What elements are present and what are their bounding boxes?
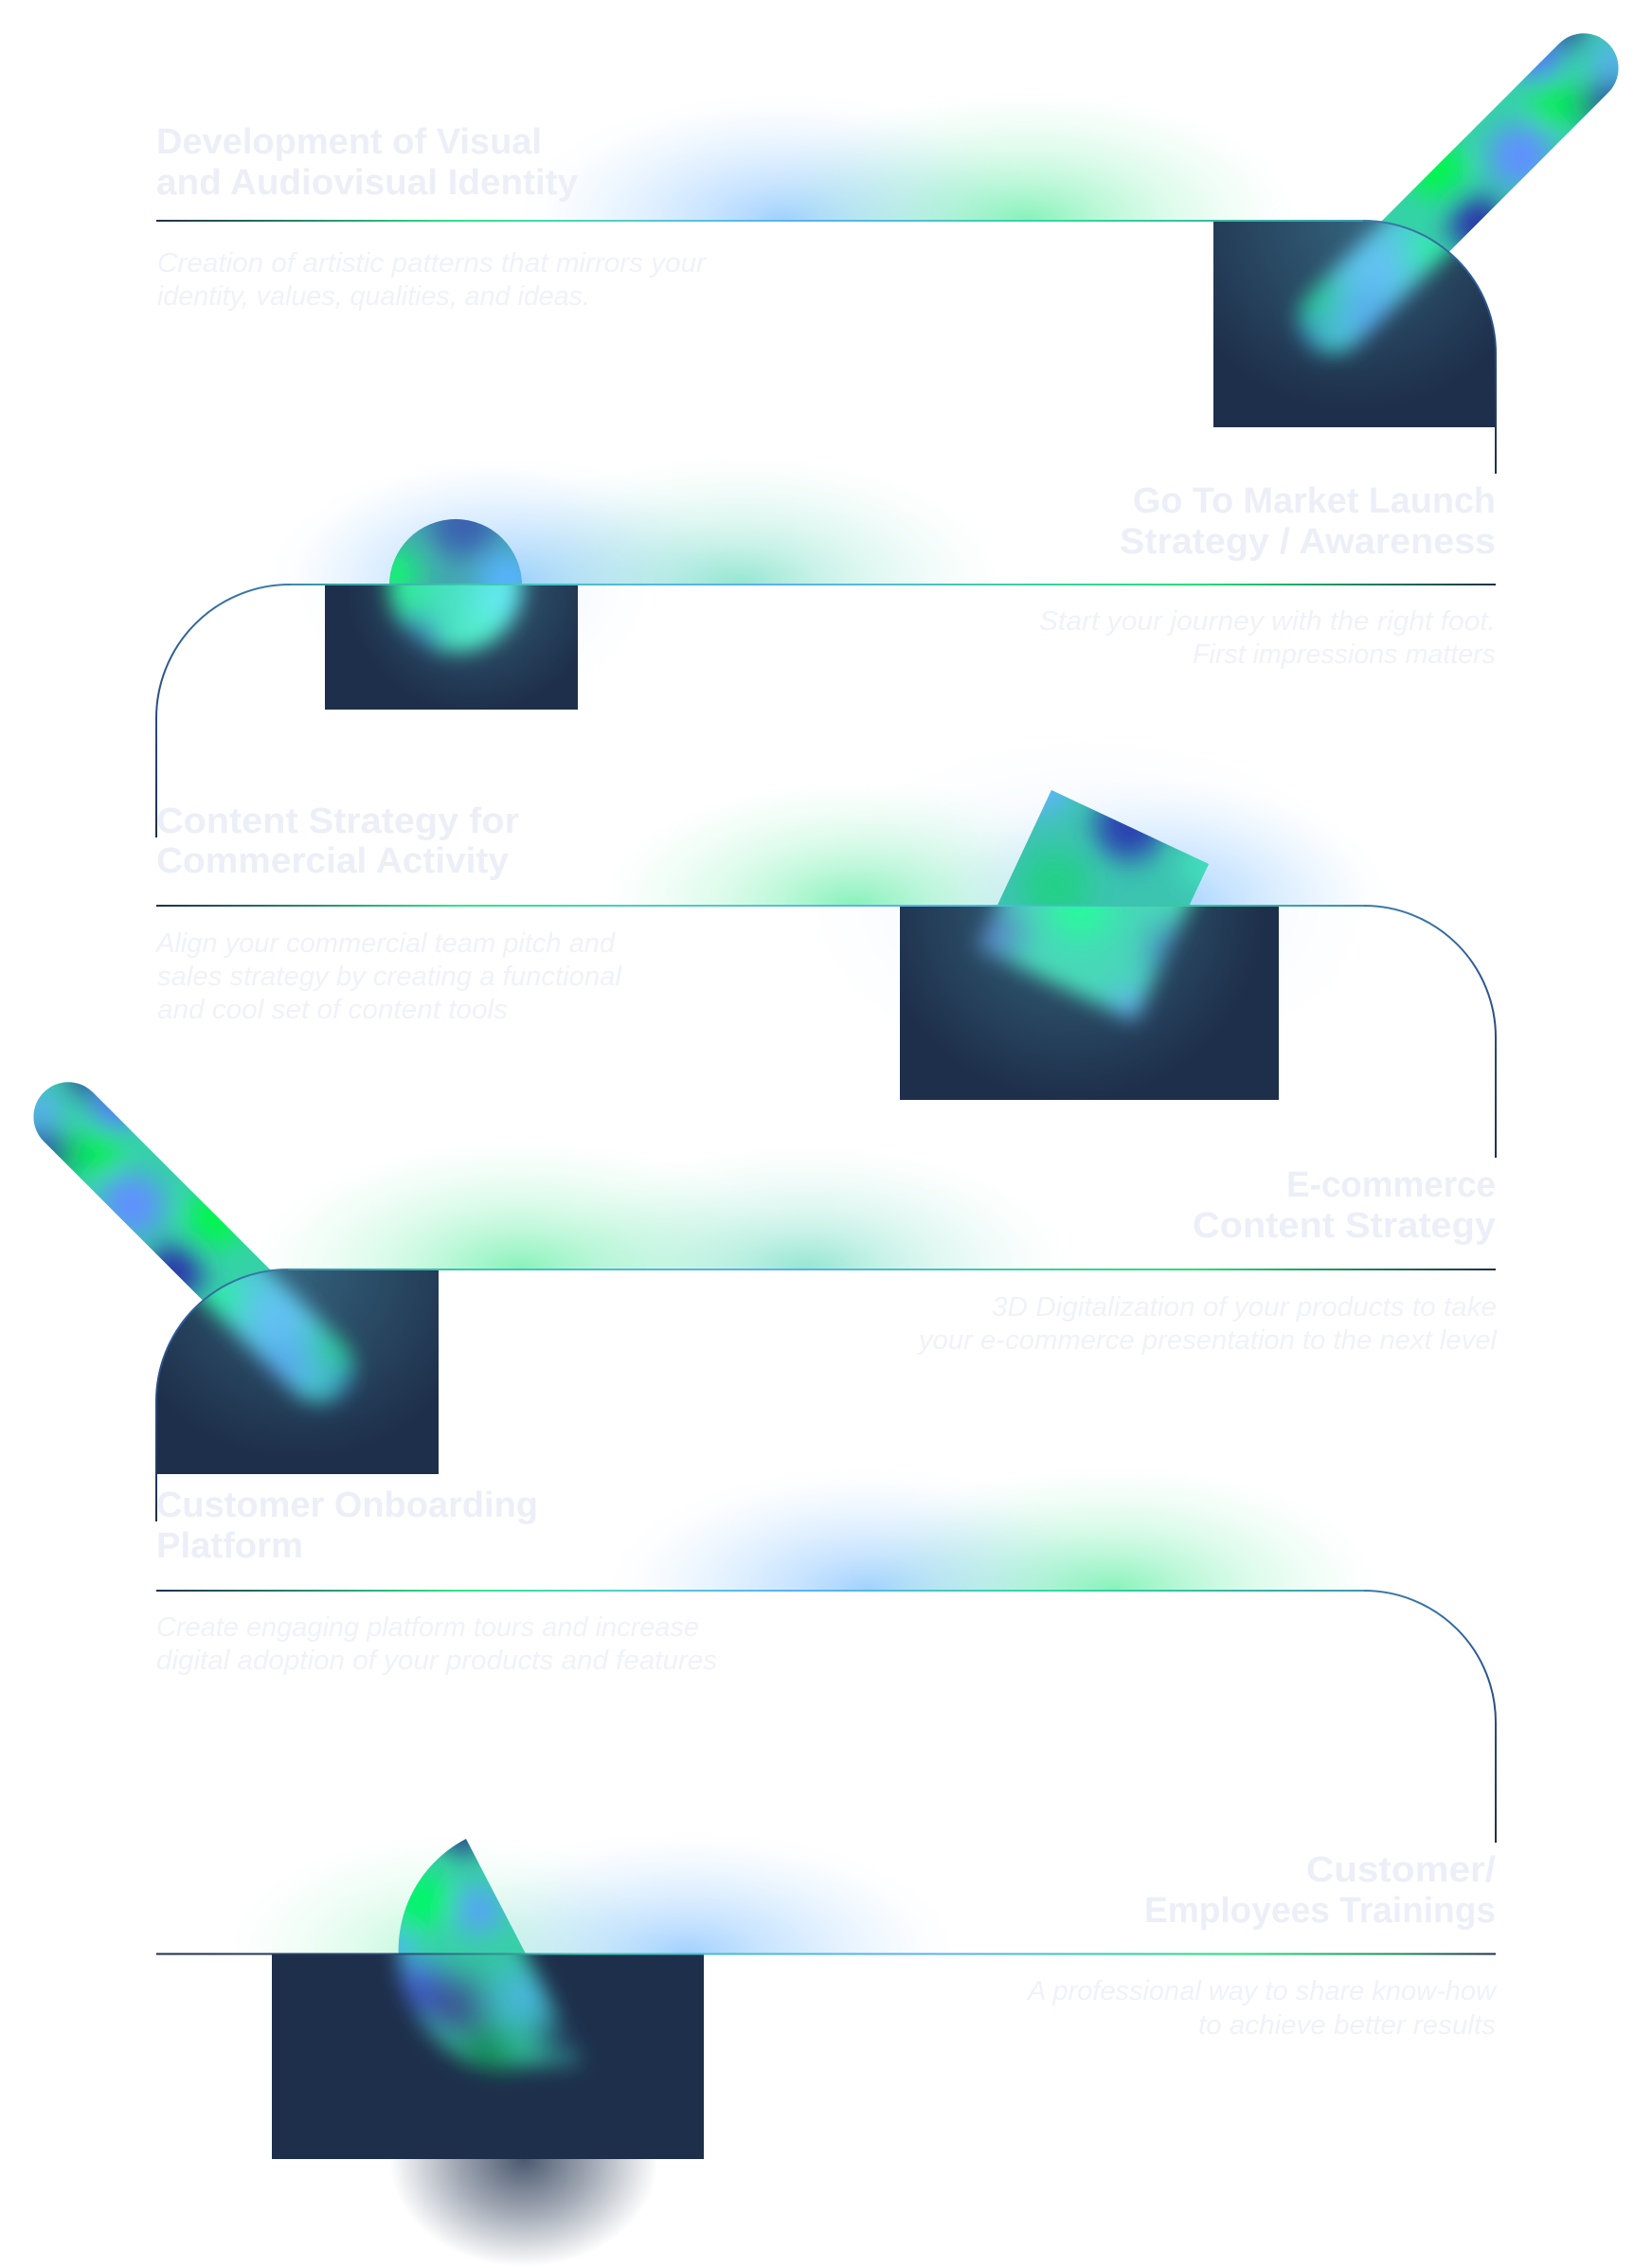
icon: blurred circle inside panel [373, 585, 537, 667]
heading 2 [1120, 481, 1496, 562]
description 4: 3D Digitalization of your products to take [992, 1292, 1497, 1323]
path line 1 [156, 221, 1496, 474]
heading 4 [1193, 1165, 1496, 1246]
glow above line 1 [567, 111, 1256, 220]
description 4: your e-commerce presentation to the next level [917, 1325, 1499, 1356]
heading 1: and Audiovisual Identity [156, 163, 578, 203]
glow around line 3 [640, 788, 1355, 905]
description 6: to achieve better results [1198, 2010, 1496, 2041]
description 1: identity, values, qualities, and ideas. [157, 281, 590, 312]
icon: blurred bar inside panel [1285, 222, 1459, 368]
description 1 [157, 248, 707, 312]
section 2: go to market [156, 452, 1496, 837]
section 1: visual identity [156, 8, 1634, 474]
heading 4: Content Strategy [1193, 1206, 1496, 1246]
glow above line 4 [293, 1160, 1021, 1269]
heading 3 [156, 801, 519, 881]
description 2: Start your journey with the right foot. [1039, 606, 1496, 637]
icon: blurred bar inside panel [192, 1270, 367, 1415]
heading 3: Commercial Activity [156, 841, 509, 881]
icon: bar above panel [1381, 33, 1619, 252]
panel 1 [1213, 221, 1496, 427]
icon: wedge above panel [398, 1839, 525, 1953]
heading 5: Customer Onboarding [156, 1485, 538, 1525]
shadow under panel 6 [389, 2051, 658, 2267]
path line 5 [156, 1591, 1496, 1843]
panel 4 [156, 1269, 439, 1474]
heading 1: Development of Visual [156, 122, 542, 162]
description 5: Create engaging platform tours and increase [156, 1612, 699, 1643]
heading 6 [1144, 1850, 1496, 1931]
icon: square above panel [997, 790, 1209, 905]
glow above line 6 [273, 1854, 906, 1953]
section 5: onboarding [156, 1463, 1496, 1843]
heading 5: Platform [156, 1526, 303, 1566]
heading 6: Employees Trainings [1144, 1891, 1496, 1931]
description 5: digital adoption of your products and features [156, 1646, 717, 1676]
heading 2: Go To Market Launch [1133, 481, 1496, 521]
heading 2: Strategy / Awareness [1120, 522, 1496, 562]
heading 4: E-commerce [1286, 1165, 1496, 1205]
description 3: Align your commercial team pitch and [154, 928, 616, 959]
path line 4 [156, 1269, 1496, 1521]
icon: bar above panel [33, 1082, 271, 1300]
description 4 [917, 1292, 1499, 1356]
heading 3: Content Strategy for [156, 801, 519, 841]
section 6: trainings [156, 1806, 1498, 2267]
heading 5 [156, 1485, 538, 1566]
path line 3 [156, 906, 1496, 1158]
description 6 [1026, 1976, 1498, 2041]
description 1: Creation of artistic patterns that mirrors your [157, 248, 707, 279]
panel 3 [900, 906, 1279, 1100]
description 2: First impressions matters [1193, 639, 1496, 670]
icon: blurred square inside panel [969, 907, 1206, 1032]
heading 6: Customer/ [1306, 1850, 1496, 1890]
panel 6 [272, 1953, 704, 2159]
glow above line 5 [656, 1485, 1338, 1590]
path line 6 [156, 1953, 1496, 1955]
path line 2 [156, 585, 1496, 837]
icon: mirrored bar and panel [18, 1056, 439, 1474]
icon: blurred wedge inside panel [385, 1955, 587, 2083]
description 5 [156, 1612, 717, 1676]
description 3: and cool set of content tools [157, 995, 508, 1025]
section 4: e-commerce [18, 1056, 1499, 1521]
glow around line 2 [305, 477, 955, 584]
description 6: A professional way to share know-how [1026, 1976, 1498, 2007]
description 2 [1039, 606, 1496, 670]
section 3: content strategy [155, 788, 1497, 1158]
description 3 [154, 928, 623, 1025]
description 3: sales strategy by creating a functional [157, 962, 623, 992]
heading 1 [156, 122, 578, 203]
panel 2 [325, 585, 578, 710]
icon: circle above panel [389, 519, 522, 584]
